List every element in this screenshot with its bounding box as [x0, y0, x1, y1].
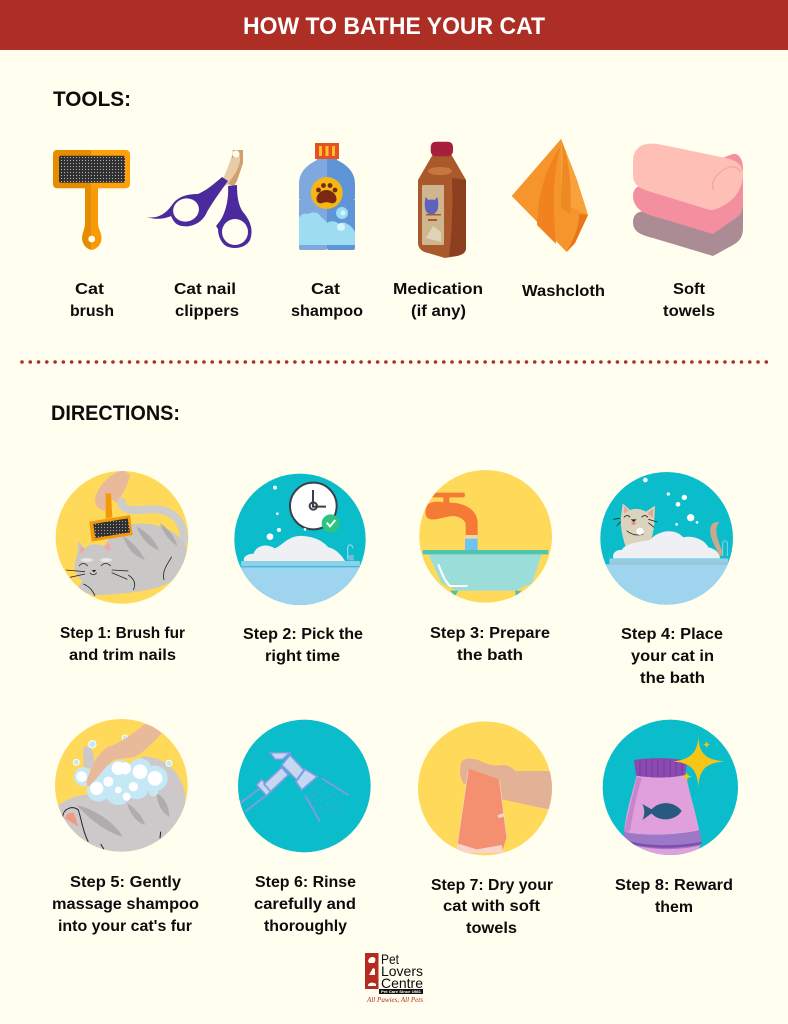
step captions: your cat in — [631, 648, 714, 665]
tool labels: Soft — [673, 281, 706, 298]
step captions: Step 5: Gently — [70, 874, 181, 891]
step 1 illustration: brushing a cat — [56, 470, 188, 604]
step 4 illustration: cat in the bath — [600, 472, 733, 606]
icon: medication bottle — [418, 142, 466, 258]
heading: directions: DIRECTIONS: — [51, 402, 180, 425]
tool labels — [70, 281, 715, 320]
step captions: Step 2: Pick the — [243, 626, 363, 643]
step captions: them — [655, 899, 693, 916]
icon: soft towels stack — [633, 144, 743, 256]
step captions: into your cat's fur — [58, 918, 192, 935]
tool labels: clippers — [175, 303, 239, 320]
step captions: towels — [466, 920, 517, 937]
heading: tools: TOOLS: — [53, 88, 131, 111]
tool labels: (if any) — [411, 303, 466, 320]
step captions: Step 1: Brush fur — [60, 625, 185, 642]
step captions: Step 7: Dry your — [431, 877, 553, 894]
title banner — [0, 0, 788, 50]
step 3 illustration: faucet and tub — [419, 470, 552, 603]
logo: Pet Lovers Centre: Centre — [381, 975, 423, 991]
step captions: the bath — [640, 670, 705, 687]
step captions: carefully and — [254, 896, 356, 913]
logo: Pet Lovers Centre: Pet Care Since 1981 — [381, 989, 422, 994]
title banner: HOW TO BATHE YOUR CAT — [243, 13, 545, 40]
step captions — [52, 625, 733, 937]
step captions: and trim nails — [69, 647, 176, 664]
tool labels: Cat — [311, 281, 341, 298]
tool labels: Medication — [393, 281, 483, 298]
icon: cat brush — [53, 150, 130, 250]
step 5 illustration: massaging shampoo — [53, 719, 188, 857]
step captions: right time — [265, 648, 340, 665]
tool labels: shampoo — [291, 303, 363, 320]
step 7 illustration: drying with towel — [418, 721, 553, 855]
step captions: the bath — [457, 647, 523, 664]
icon: cat shampoo bottle — [299, 143, 355, 250]
step 6 illustration: shower head rinse — [238, 720, 371, 852]
tool labels: brush — [70, 303, 114, 320]
step captions: Step 4: Place — [621, 626, 723, 643]
step captions: thoroughly — [264, 918, 347, 935]
tool labels: Cat nail — [174, 281, 236, 298]
tool labels: Cat — [75, 281, 105, 298]
step 2 illustration: clock and bath — [233, 474, 367, 607]
step captions: Step 3: Prepare — [430, 625, 550, 642]
logo: Pet Lovers Centre: All Pawies, All Pets — [366, 996, 423, 1004]
step 8 illustration: cat food reward — [603, 720, 738, 857]
step captions: massage shampoo — [52, 896, 199, 913]
icon: orange washcloth — [512, 139, 588, 252]
tool labels: towels — [663, 303, 715, 320]
logo: Pet Lovers Centre: Lovers — [381, 963, 423, 979]
step captions: Step 8: Reward — [615, 877, 733, 894]
logo: Pet Lovers Centre — [365, 951, 423, 1004]
step captions: cat with soft — [443, 898, 541, 915]
icon: cat nail clippers — [147, 150, 252, 248]
tool labels: Washcloth — [522, 283, 605, 300]
step captions: Step 6: Rinse — [255, 874, 356, 891]
logo: Pet Lovers Centre: Pet — [381, 951, 399, 967]
